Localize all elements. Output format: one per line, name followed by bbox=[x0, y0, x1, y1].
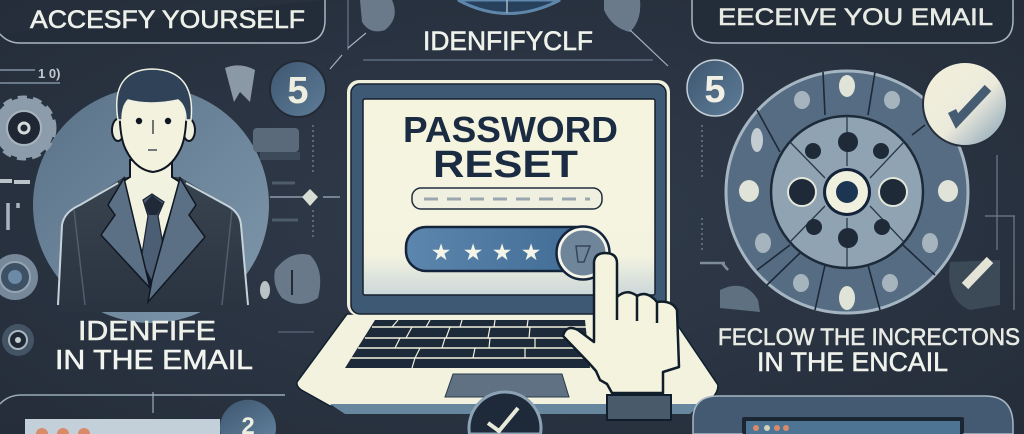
inner disc bbox=[771, 116, 923, 268]
panel: top left heading bbox=[0, 0, 325, 43]
panel: top center identify bbox=[330, 0, 668, 69]
left side icons bbox=[0, 66, 60, 356]
window dots bbox=[36, 428, 90, 434]
badge 5 right bbox=[687, 60, 743, 116]
wheel diagram bbox=[726, 71, 968, 313]
label: person caption: IN THE EMAIL bbox=[55, 344, 253, 375]
laptop base bbox=[297, 314, 718, 406]
eyes and mouth bbox=[136, 118, 142, 124]
icon: left top ornament bbox=[360, 0, 395, 31]
label: identify: IDENFIFYCLF bbox=[423, 26, 593, 56]
keyboard bbox=[345, 320, 590, 368]
password button bbox=[406, 226, 610, 280]
icon: badge 5 left bbox=[270, 61, 326, 117]
label: wheel caption bbox=[718, 324, 1020, 377]
icon: concentric ring small bbox=[2, 324, 34, 356]
input field bbox=[412, 188, 602, 209]
icon: gear bbox=[0, 98, 54, 158]
password button: ★ bbox=[431, 239, 451, 265]
icon: glove ornament bbox=[225, 65, 255, 102]
badge 5 right: 5 bbox=[704, 69, 726, 111]
screen bezel bbox=[347, 80, 670, 316]
icon: pointing hand bbox=[563, 253, 679, 420]
badge 2 bbox=[220, 400, 276, 434]
label: person caption: IDENFIFE bbox=[78, 315, 216, 346]
icon: right top ornament bbox=[604, 0, 640, 32]
panel: person illustration bbox=[33, 69, 269, 323]
neck and shirt bbox=[122, 160, 180, 282]
head bbox=[112, 119, 124, 141]
icon: device bbox=[253, 128, 300, 160]
panel: bottom left bbox=[0, 392, 285, 434]
trackpad bbox=[445, 374, 569, 397]
icon: small bracket bbox=[8, 203, 18, 230]
ring glyphs bbox=[739, 75, 958, 310]
password button: ★ bbox=[492, 239, 512, 265]
heading: receive your email: EECEIVE YOU EMAIL bbox=[718, 4, 993, 31]
laptop bbox=[297, 80, 718, 414]
password button: ★ bbox=[521, 239, 541, 265]
hand cuff bbox=[607, 395, 671, 420]
icon: scooter ornament bbox=[720, 286, 760, 312]
icon: connector diamond bbox=[270, 189, 340, 206]
middle column icons bbox=[225, 61, 340, 332]
panel: bottom right bbox=[693, 396, 1013, 434]
icon: badge 5 left: 5 bbox=[287, 70, 309, 112]
right side icons bbox=[700, 125, 1015, 312]
screen title: RESET bbox=[433, 144, 578, 186]
panel: top right heading bbox=[692, 0, 1013, 43]
outer ring bbox=[726, 71, 968, 313]
heading: accesfy yourself: ACCESFY YOURSELF bbox=[30, 6, 305, 34]
tie bbox=[141, 194, 166, 282]
check badge bbox=[923, 62, 1007, 146]
label: person caption bbox=[55, 315, 253, 375]
password button: ★ bbox=[463, 239, 483, 265]
icon: pencil ornament bbox=[949, 260, 1000, 310]
suit bbox=[58, 177, 248, 312]
hair bbox=[117, 69, 192, 120]
icon: blob ornament bbox=[260, 254, 320, 304]
right lapel bbox=[148, 178, 205, 302]
screen title: PASSWORD bbox=[403, 109, 618, 150]
disc behind person bbox=[33, 87, 269, 323]
screen title bbox=[403, 109, 618, 186]
arrows bbox=[330, 30, 668, 69]
screen bbox=[363, 99, 655, 295]
window dots bbox=[753, 425, 789, 431]
icon: concentric ring large bbox=[0, 254, 38, 300]
hub bbox=[823, 168, 871, 216]
button circle bbox=[559, 229, 607, 277]
spokes dots bbox=[838, 132, 858, 152]
icon: bottom center check bbox=[469, 392, 541, 434]
left lapel bbox=[101, 178, 150, 288]
icon: number 10: 1 0) bbox=[38, 66, 60, 81]
label: wheel caption: IN THE ENCAIL bbox=[757, 347, 948, 377]
